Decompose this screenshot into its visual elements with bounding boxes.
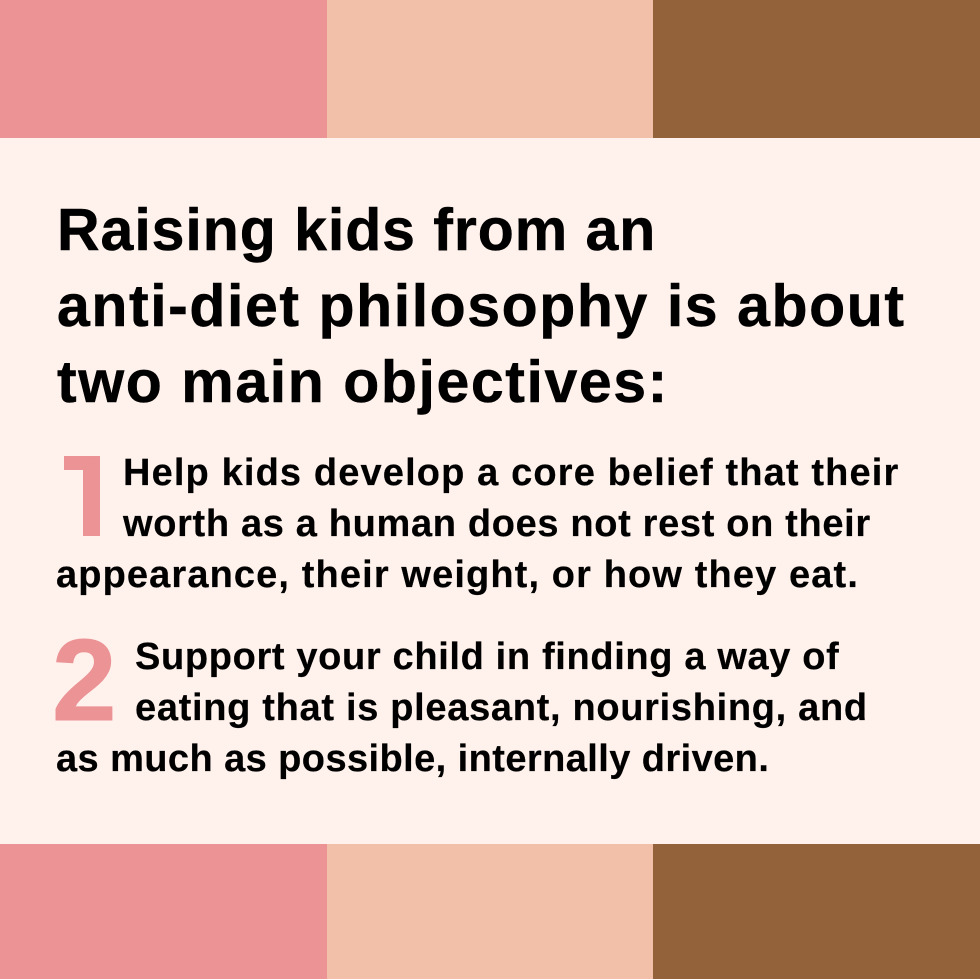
title: two main objectives:: [57, 349, 669, 415]
objective 2 text: [56, 636, 868, 780]
objective 1 text: Help kids develop a core belief that their: [123, 452, 899, 494]
objective 1 text: [56, 452, 899, 596]
objective 1 text: worth as a human does not rest on their: [123, 503, 871, 545]
top colour band: [0, 0, 980, 138]
objective 2 numeral: 2: [52, 615, 117, 745]
objective 2 text: Support your child in finding a way of: [135, 636, 839, 678]
title: anti-diet philosophy is about: [57, 273, 906, 339]
title: Raising kids from an: [57, 197, 656, 263]
objective 2 text: eating that is pleasant, nourishing, and: [135, 687, 868, 729]
title: [57, 197, 906, 415]
objective 1 text: appearance, their weight, or how they eat.: [56, 554, 859, 596]
objective 2 text: as much as possible, internally driven.: [56, 738, 769, 780]
bottom colour band: [0, 844, 980, 979]
